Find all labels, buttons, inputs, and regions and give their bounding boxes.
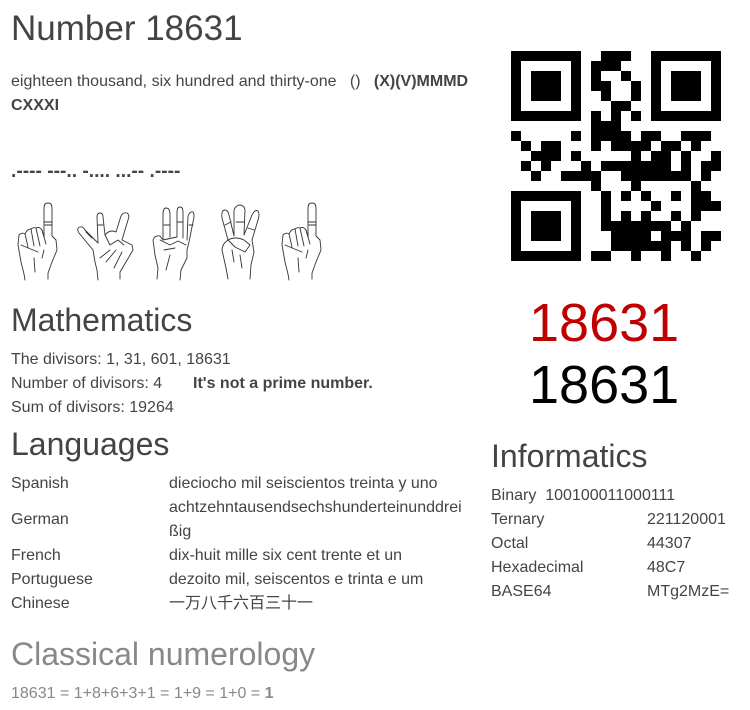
- languages table: dix-huit mille six cent trente et un: [169, 547, 402, 564]
- languages table: [11, 475, 462, 612]
- mathematics facts: Sum of divisors: 19264: [11, 399, 174, 416]
- number in words and roman numeral: eighteen thousand, six hundred and thirty-one () (X)(V)MMMD: [11, 73, 468, 90]
- languages table: dezoito mil, seiscentos e trinta e um: [169, 571, 423, 588]
- number in words and roman numeral: [11, 73, 468, 114]
- mathematics facts: [11, 351, 373, 416]
- informatics table: 44307: [647, 535, 692, 552]
- languages table: Chinese: [11, 595, 70, 612]
- number in black: 18631: [529, 355, 679, 415]
- languages table: Spanish: [11, 475, 69, 492]
- informatics table: 48C7: [647, 559, 685, 576]
- languages table: ßig: [169, 523, 191, 540]
- heading: Mathematics: Mathematics: [11, 302, 192, 338]
- informatics table: Binary 100100011000111: [491, 487, 675, 504]
- numerology sum: 18631 = 1+8+6+3+1 = 1+9 = 1+0 = 1: [11, 685, 273, 702]
- icon: hand digit 1: [18, 203, 57, 280]
- icon: hand digit 8: [78, 213, 133, 280]
- sign language hands: [18, 202, 322, 280]
- title: Number 18631: [11, 9, 243, 48]
- languages table: achtzehntausendsechshunderteinunddrei: [169, 499, 462, 516]
- heading: Informatics: Informatics: [491, 438, 647, 474]
- mathematics facts: The divisors: 1, 31, 601, 18631: [11, 351, 231, 368]
- icon: hand digit 6: [153, 207, 194, 280]
- mathematics facts: It's not a prime number.: [193, 375, 373, 392]
- informatics table: MTg2MzE=: [647, 583, 729, 600]
- icon: hand digit 1: [282, 203, 321, 280]
- number in words and roman numeral: CXXXI: [11, 97, 59, 114]
- languages table: dieciocho mil seiscientos treinta y uno: [169, 475, 438, 492]
- languages table: 一万八千六百三十一: [169, 595, 313, 612]
- QR code: [511, 51, 721, 261]
- informatics table: Ternary: [491, 511, 544, 528]
- informatics table: [491, 487, 729, 600]
- mathematics facts: Number of divisors: 4: [11, 375, 162, 392]
- informatics table: Hexadecimal: [491, 559, 583, 576]
- informatics table: Octal: [491, 535, 528, 552]
- heading: Languages: Languages: [11, 426, 169, 462]
- languages table: French: [11, 547, 61, 564]
- informatics table: 221120001: [647, 511, 726, 528]
- morse code: .---- ---.. -.... ...-- .----: [11, 161, 180, 182]
- heading: Classical numerology: Classical numerology: [11, 636, 315, 672]
- languages table: German: [11, 511, 69, 528]
- languages table: Portuguese: [11, 571, 93, 588]
- informatics table: BASE64: [491, 583, 551, 600]
- number in red: 18631: [529, 293, 679, 353]
- icon: hand digit 3: [222, 205, 259, 279]
